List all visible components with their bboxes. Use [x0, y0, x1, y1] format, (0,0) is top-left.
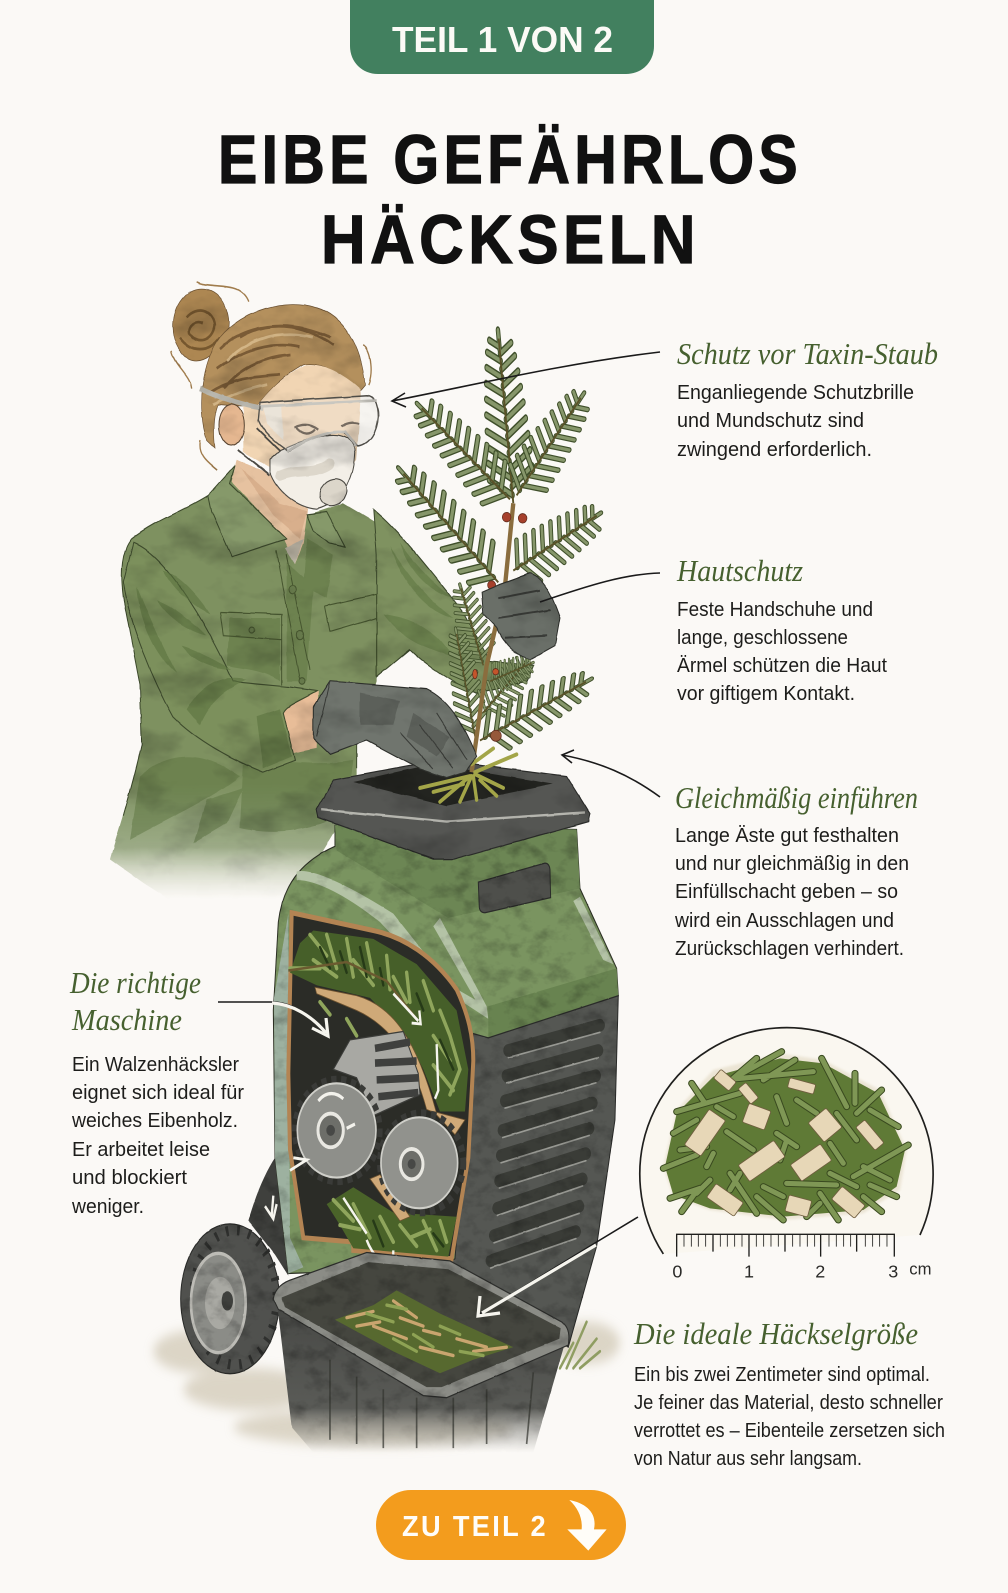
callout: Die richtige Maschine: Ein Walzenhäcksler: [72, 1053, 239, 1076]
magnifier outline: [640, 1028, 933, 1254]
lower black panel: [440, 996, 618, 1347]
shirt shading: [130, 539, 353, 843]
shredder machine: [153, 825, 620, 1452]
left sleeve: [123, 543, 317, 772]
callout: Gleichmäßig einführen: Gleichmäßig einführen: [675, 780, 918, 815]
berries: [473, 512, 527, 741]
shirt torso: [110, 472, 377, 911]
lower green band: [488, 968, 618, 1038]
callout: Gleichmäßig einführen: Lange Äste gut festhalten: [675, 824, 899, 847]
callout: Gleichmäßig einführen: wird ein Ausschlagen und: [674, 909, 894, 932]
cutaway opening: [288, 913, 473, 1259]
collar: [208, 466, 345, 557]
mask straps: [238, 428, 283, 476]
neck shade: [240, 468, 307, 539]
wheel: [181, 1224, 279, 1374]
callout: Die ideale Häckselgröße: von Natur aus sehr langsam.: [634, 1447, 862, 1470]
neck shade: [335, 825, 580, 918]
hair: [202, 304, 365, 448]
callout: Die richtige Maschine: und blockiert: [72, 1166, 187, 1189]
callout: Hautschutz: vor giftigem Kontakt.: [677, 682, 855, 705]
pockets and buttons: [220, 551, 377, 685]
callout: Die ideale Häckselgröße: Je feiner das Material, desto schneller: [634, 1391, 943, 1414]
collection bin: [273, 1252, 569, 1452]
rear roller: [333, 1031, 420, 1116]
yew branch: [384, 327, 611, 802]
undershirt: [285, 539, 303, 565]
button: Zu Teil 2: [376, 1490, 626, 1560]
left sleeve folds: [137, 571, 292, 768]
face: [243, 365, 361, 491]
bun swirl: [180, 311, 220, 349]
top hopper: [317, 760, 590, 859]
stem: [472, 503, 513, 772]
goggles strap: [200, 389, 263, 408]
shirt outline: [122, 495, 357, 816]
callout: Die ideale Häckselgröße: verrottet es – Eibenteile zersetzen sich: [634, 1419, 945, 1442]
callout: Schutz vor Taxin-Staub: [392, 336, 938, 461]
goggles: [258, 396, 378, 451]
title: HÄCKSELN: [321, 201, 700, 278]
ruler: 3: [888, 1262, 898, 1282]
arrow to rollers: [218, 1002, 328, 1036]
callout: Schutz vor Taxin-Staub: Schutz vor Taxin-Staub: [677, 336, 938, 371]
right gear: [380, 1113, 463, 1212]
hair bun: [173, 289, 229, 361]
callout: Gleichmäßig einführen: [562, 750, 918, 960]
callout: Die richtige Maschine: Er arbeitet leise: [72, 1138, 210, 1161]
sleeve folds: [383, 543, 453, 657]
callout: Hautschutz: Ärmel schützen die Haut: [677, 654, 887, 677]
callout: Die richtige Maschine: weiches Eibenholz.: [71, 1109, 238, 1132]
callout: Hautschutz: lange, geschlossene: [677, 626, 848, 649]
eyes: [295, 423, 359, 434]
callout: Hautschutz: Feste Handschuhe und: [677, 598, 873, 621]
callout: Gleichmäßig einführen: und nur gleichmäßig in den: [675, 852, 909, 875]
callout: Die ideale Häckselgröße: Ein bis zwei Zentimeter sind optimal.: [634, 1363, 930, 1386]
ruler: 0: [672, 1262, 682, 1282]
wood chips: [684, 1069, 884, 1218]
wisps: [172, 282, 371, 470]
callout: Hautschutz: [540, 553, 887, 705]
left gear: [295, 1079, 380, 1182]
callout: Die richtige Maschine: Maschine: [71, 1002, 182, 1037]
lower glove: [313, 681, 477, 778]
mask: [270, 435, 355, 509]
ruler: cm: [909, 1260, 932, 1279]
arrow to hopper: [562, 750, 660, 797]
badge: Teil 1 von 2: TEIL 1 VON 2: [392, 19, 613, 60]
title: [218, 121, 802, 278]
left pale side: [274, 914, 303, 1274]
callout: Die richtige Maschine: [69, 965, 328, 1218]
line to glove: [540, 573, 660, 602]
ruler: 1: [744, 1262, 754, 1282]
arrow to bin: [478, 1217, 638, 1316]
side twigs: [384, 327, 611, 761]
callout: Die richtige Maschine: Die richtige: [69, 965, 201, 1000]
ear: [219, 404, 244, 446]
icon: curved down arrow: [567, 1500, 607, 1551]
callout: Die richtige Maschine: eignet sich ideal für: [72, 1081, 244, 1104]
illustration: woman in protective gear: [110, 282, 533, 911]
flow arrows: [265, 994, 438, 1295]
highlights: [297, 871, 613, 1019]
callout: Gleichmäßig einführen: Zurückschlagen verhindert.: [675, 937, 904, 960]
callout: Die ideale Häckselgröße: [478, 1217, 945, 1470]
gloves: [313, 574, 560, 778]
title: EIBE GEFÄHRLOS: [218, 121, 802, 198]
mask valve: [316, 474, 350, 510]
upper glove: [482, 574, 560, 659]
foliage inside: [288, 930, 468, 1257]
wood strip: [315, 987, 437, 1114]
callout: Die ideale Häckselgröße: Die ideale Häckselgröße: [633, 1316, 918, 1351]
lower sprays: [441, 578, 540, 740]
base foliage in hopper: [420, 748, 517, 802]
grass tuft: [560, 1322, 600, 1368]
ground shadow: [153, 1322, 620, 1446]
callout: Die richtige Maschine: weniger.: [71, 1195, 144, 1218]
callout: Schutz vor Taxin-Staub: Enganliegende Schutzbrille: [677, 381, 914, 404]
neck: [232, 460, 308, 565]
skin: wrist: [283, 691, 318, 754]
ruler: 2: [815, 1262, 825, 1282]
vent slots: [491, 1025, 600, 1268]
callout: Schutz vor Taxin-Staub: zwingend erforderlich.: [677, 438, 872, 461]
display plate: [478, 863, 551, 913]
callout: Hautschutz: Hautschutz: [676, 553, 803, 588]
right sleeve: [373, 509, 533, 693]
badge: Teil 1 von 2: [350, 0, 654, 74]
shredded material in bin: [335, 1290, 513, 1373]
machine body: [273, 825, 618, 1274]
detail circle: chip size: [640, 1028, 933, 1282]
callout: Schutz vor Taxin-Staub: und Mundschutz sind: [677, 409, 864, 432]
shredded pile: [663, 1052, 908, 1220]
callout: Gleichmäßig einführen: Einfüllschacht geben – so: [675, 880, 898, 903]
hair strands: [210, 326, 333, 393]
arrow to goggles: [392, 352, 660, 407]
ruler: [672, 1234, 932, 1282]
button: Zu Teil 2: ZU TEIL 2: [402, 1511, 548, 1543]
wheel arch: [248, 1158, 288, 1276]
